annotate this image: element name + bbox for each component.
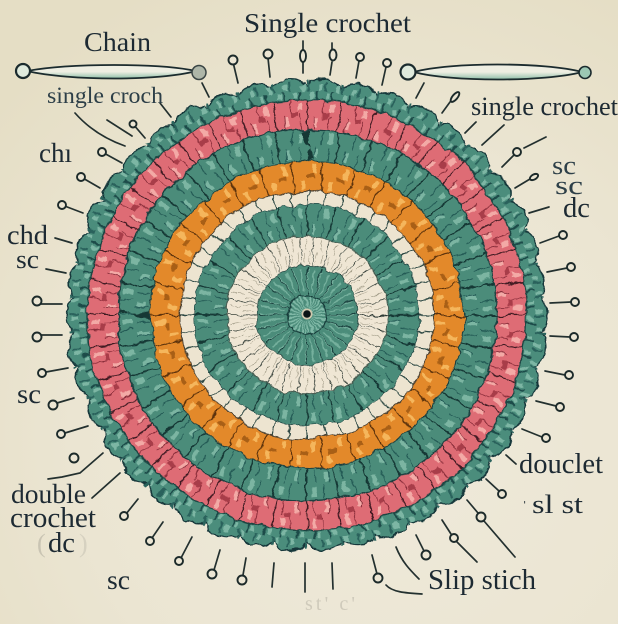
label: sl st: ˈ (522, 499, 527, 516)
pins: top and upper left (32, 41, 306, 306)
label: sc bottom: sc (107, 565, 130, 595)
label: single crochet top: Single crochet (244, 8, 412, 38)
label: sc right: sc (552, 151, 576, 180)
pins: left side (32, 332, 192, 565)
outer scalloped green edge (74, 87, 540, 543)
label: sc left upper: sc (16, 245, 39, 274)
label: chd: chd (7, 220, 49, 250)
label: double crochet (dc) (10, 479, 96, 559)
pink ring (88, 100, 526, 530)
label: sc left lower: sc (17, 379, 41, 409)
label: chain: Chain (84, 27, 152, 57)
label: single croch: single croch (47, 83, 164, 108)
cream ring (226, 236, 388, 394)
pins: bottom (208, 479, 515, 594)
center green (256, 265, 358, 365)
label: dc right: dc (563, 193, 590, 224)
label: douclet: douclet (519, 449, 603, 480)
green band inner (203, 213, 411, 417)
doily (74, 87, 540, 543)
green band outer (118, 129, 496, 501)
center hole (302, 308, 312, 320)
label: double crochet (dc): crochet (10, 503, 96, 534)
thin cream ring (180, 191, 434, 439)
right needle (400, 64, 591, 80)
label: double crochet (dc): dc (48, 528, 75, 559)
label: double crochet (dc): ) (79, 529, 88, 558)
orange ring (159, 170, 455, 460)
label: sc right second: sc (555, 171, 583, 200)
label: sl st: sl st (532, 490, 584, 519)
label: slip stich: Slip stich (428, 564, 536, 596)
label: double crochet (dc): double (11, 479, 86, 509)
label: single crochet right: single crochet (471, 92, 618, 121)
label: double crochet (dc): ( (37, 529, 46, 558)
faded text: st' c' (305, 593, 355, 615)
pins: right side (330, 43, 579, 464)
left needle (16, 64, 206, 80)
label: chi: chı (39, 138, 72, 168)
